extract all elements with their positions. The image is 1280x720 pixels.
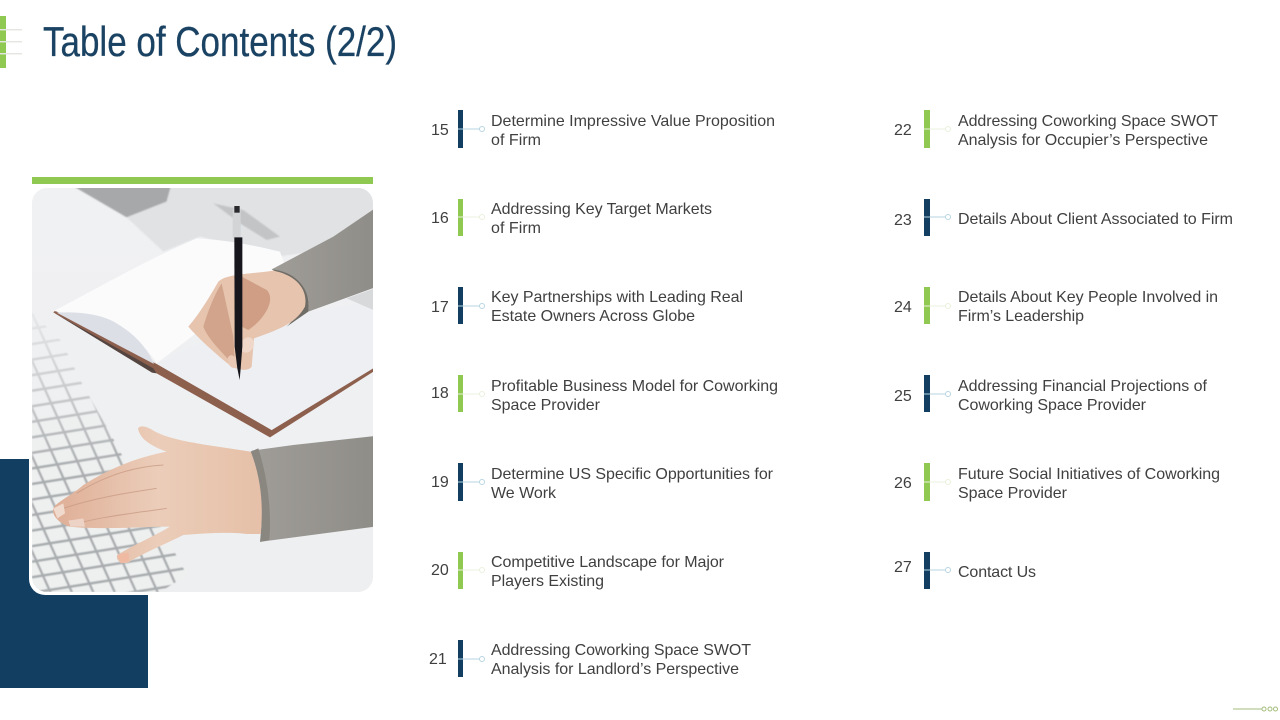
contents item 18 [431,375,778,414]
lower sleeve [252,436,375,542]
text 25: Addressing Financial Projections of [958,378,1208,395]
text 17: Estate Owners Across Globe [491,308,695,325]
bar and connector 24 [924,287,950,324]
text 15: of Firm [491,132,541,149]
number 25: 25 [894,388,912,405]
green bar above photo [32,177,373,184]
text 22: Addressing Coworking Space SWOT [958,113,1218,130]
contents item 15 [431,110,775,149]
number 15: 15 [431,122,449,139]
text 27: Contact Us [958,564,1036,581]
upper sleeve [272,208,375,312]
text 24: Details About Key People Involved in [958,289,1218,306]
bar and connector 23 [924,199,950,236]
title: Table of Contents (2/2) [43,18,397,65]
text 17: Key Partnerships with Leading Real [491,289,743,306]
bar and connector 15 [458,110,484,148]
bar and connector 18 [458,375,484,412]
keyboard [32,313,187,592]
bar and connector 16 [458,199,484,236]
pen [233,206,242,380]
bar and connector 27 [924,552,950,589]
photo frame [29,188,373,595]
contents item 24 [894,287,1218,325]
footer decoration [1233,707,1278,711]
text 21: Analysis for Landlord’s Perspective [491,661,739,678]
text 24: Firm’s Leadership [958,308,1084,325]
bar and connector 21 [458,640,484,677]
text 18: Space Provider [491,397,601,414]
text 19: We Work [491,485,557,502]
number 24: 24 [894,299,912,316]
navy backing block [0,459,148,688]
text 22: Analysis for Occupier’s Perspective [958,132,1208,149]
contents item 27 [894,552,1036,589]
number 23: 23 [894,212,912,229]
text 21: Addressing Coworking Space SWOT [491,642,751,659]
text 23: Details About Client Associated to Firm [958,211,1233,228]
contents item 23 [894,199,1233,236]
bar and connector 19 [458,463,484,501]
text 19: Determine US Specific Opportunities for [491,466,774,483]
contents item 20 [431,552,725,590]
bar and connector 22 [924,110,950,148]
contents item 21 [429,640,751,678]
text 26: Future Social Initiatives of Coworking [958,466,1220,483]
text 16: Addressing Key Target Markets [491,201,712,218]
number 26: 26 [894,475,912,492]
background upper area [75,188,373,256]
header decoration [0,16,22,68]
number 27: 27 [894,559,912,576]
number 22: 22 [894,122,912,139]
upper hand [188,271,306,370]
contents item 16 [431,199,712,237]
contents item 19 [431,463,774,502]
text 20: Competitive Landscape for Major [491,554,725,571]
number 19: 19 [431,474,449,491]
text 25: Coworking Space Provider [958,397,1147,414]
text 15: Determine Impressive Value Proposition [491,113,775,130]
bar and connector 26 [924,463,950,501]
text 20: Players Existing [491,573,604,590]
bar and connector 17 [458,287,484,324]
number 18: 18 [431,385,449,402]
contents item 17 [431,287,743,325]
contents item 22 [894,110,1218,149]
number 20: 20 [431,562,449,579]
number 17: 17 [431,299,449,316]
bar and connector 25 [924,375,950,412]
text 16: of Firm [491,220,541,237]
text 18: Profitable Business Model for Coworking [491,378,778,395]
notebook [53,238,375,437]
lower hand [53,426,262,563]
contents item 25 [894,375,1208,414]
text 26: Space Provider [958,485,1068,502]
photo: hands writing in notebook beside keyboard [32,183,377,592]
number 16: 16 [431,210,449,227]
contents item 26 [894,463,1220,502]
bar and connector 20 [458,552,484,589]
number 21: 21 [429,651,447,668]
